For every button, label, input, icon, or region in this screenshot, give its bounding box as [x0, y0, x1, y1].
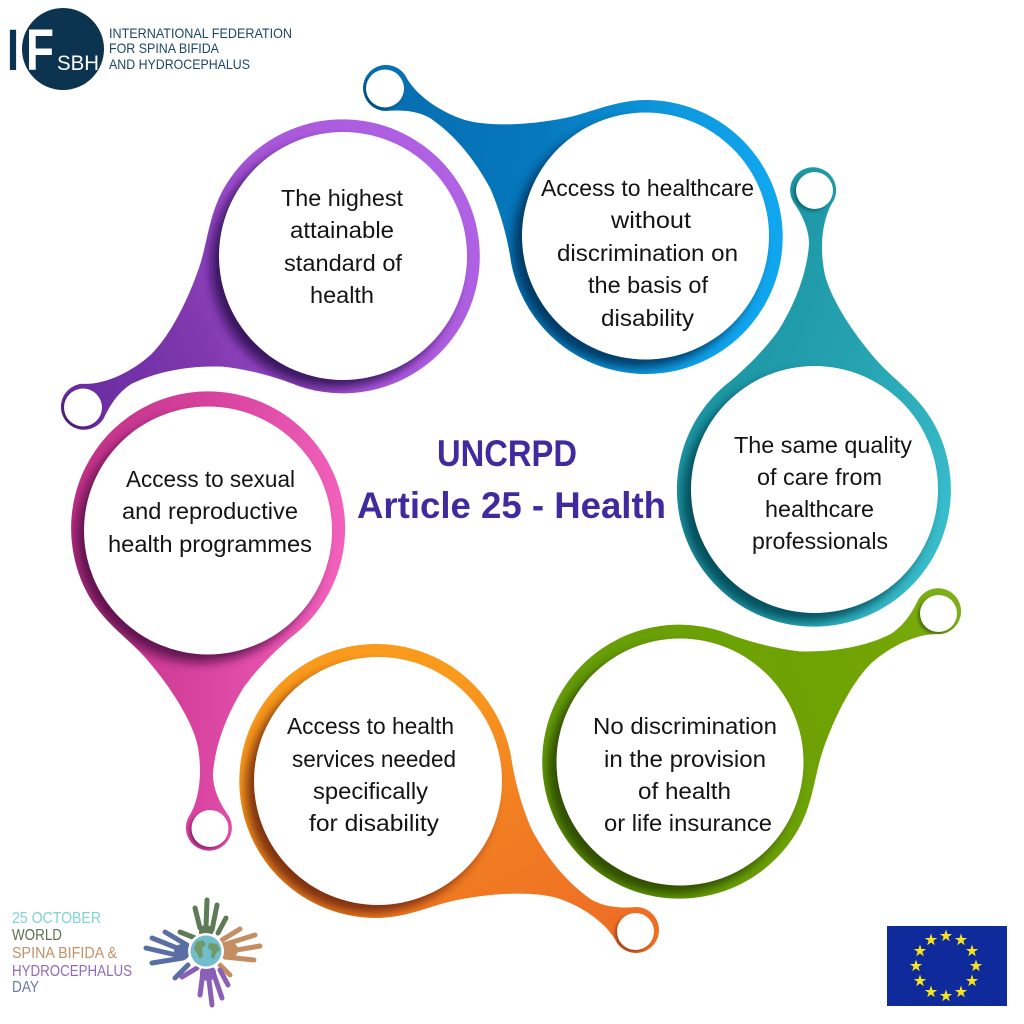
pink inner circle	[84, 406, 332, 654]
teal text: professionals	[752, 528, 888, 554]
orange text: services needed	[292, 746, 456, 772]
pink text: Access to sexual	[126, 466, 295, 492]
green text: of health	[638, 778, 731, 804]
title	[357, 433, 666, 526]
blue text: the basis of	[588, 272, 708, 298]
panel: pink, sexual and reproductive health	[0, 341, 468, 859]
panel: purple, highest attainable standard	[52, 52, 530, 570]
green small ring hole	[920, 595, 957, 632]
blue shape	[363, 65, 783, 374]
teal small ring hole	[796, 172, 833, 209]
teal text	[734, 432, 912, 554]
teal text: healthcare	[765, 496, 874, 522]
logo letter F: F	[26, 18, 54, 83]
tan hand	[220, 929, 260, 975]
icon: EU flag	[887, 926, 1007, 1006]
pink small ring hole	[192, 810, 228, 847]
orange text: Access to health	[287, 713, 454, 739]
orange inner circle	[254, 657, 502, 905]
green hand	[180, 900, 226, 939]
world day text: HYDROCEPHALUS	[12, 963, 132, 980]
green shape	[492, 448, 970, 966]
teal shadow	[682, 174, 930, 622]
purple text: attainable	[290, 217, 394, 243]
world day text: WORLD	[12, 927, 62, 944]
orange text	[287, 713, 456, 836]
world day text: SPINA BIFIDA &	[12, 945, 118, 962]
blue inner circle	[522, 112, 769, 360]
blue small ring hole	[366, 70, 404, 108]
green shadow	[548, 597, 955, 894]
title: UNCRPD	[437, 433, 577, 474]
blue text: Access to healthcare	[541, 175, 754, 201]
pink text: health programmes	[108, 531, 312, 557]
logo letter I: I	[7, 18, 19, 83]
purple hand	[182, 965, 228, 1005]
pink shadow	[76, 414, 324, 849]
organisation name: AND HYDROCEPHALUS	[109, 56, 250, 72]
panel: orange, disability services	[239, 644, 659, 953]
green inner circle	[556, 638, 804, 886]
blue text: discrimination on	[557, 240, 738, 266]
teal shape	[554, 159, 1024, 677]
organisation name: INTERNATIONAL FEDERATION	[109, 25, 292, 41]
purple text: standard of	[284, 250, 402, 276]
title: Article 25 - Health	[357, 485, 666, 526]
blue shadow	[364, 72, 762, 368]
green text: or life insurance	[604, 810, 772, 836]
organisation name	[109, 25, 292, 72]
pink text: and reproductive	[122, 498, 298, 524]
panel: teal, same quality of care	[554, 159, 1024, 677]
blue text	[541, 175, 754, 331]
blue hand	[146, 932, 190, 978]
teal text: The same quality	[734, 432, 912, 458]
orange text: specifically	[313, 778, 428, 804]
world day text	[12, 910, 132, 996]
blue text: without	[610, 207, 691, 233]
purple text: health	[310, 282, 374, 308]
organisation name: FOR SPINA BIFIDA	[109, 40, 220, 56]
purple small ring hole	[64, 388, 102, 426]
blue text: disability	[601, 305, 694, 331]
purple text	[281, 185, 403, 308]
panel: blue, access without discrimination	[363, 65, 783, 374]
logo circle	[22, 8, 104, 90]
pink text	[108, 466, 312, 557]
flag field	[887, 926, 1007, 1006]
panel: green, insurance	[492, 448, 970, 966]
world day text: 25 OCTOBER	[12, 910, 101, 927]
icon: hands around globe	[146, 900, 260, 1005]
logo letters SBH: SBH	[57, 52, 99, 75]
orange small ring hole	[617, 913, 654, 950]
green text: No discrimination	[593, 713, 777, 739]
purple shadow	[62, 140, 459, 428]
globe	[188, 933, 224, 969]
world day text: DAY	[12, 979, 39, 996]
orange shape	[239, 644, 659, 953]
logo: IFSBH	[7, 8, 292, 90]
orange text: for disability	[309, 810, 439, 836]
green text	[593, 713, 777, 836]
purple inner circle	[219, 132, 467, 380]
flag stars	[910, 930, 982, 1001]
purple text: The highest	[281, 185, 403, 211]
teal text: of care from	[757, 464, 882, 490]
orange shadow	[246, 665, 652, 952]
green text: in the provision	[604, 746, 766, 772]
teal inner circle	[691, 366, 938, 613]
purple shape	[52, 52, 530, 570]
pink shape	[0, 341, 468, 859]
